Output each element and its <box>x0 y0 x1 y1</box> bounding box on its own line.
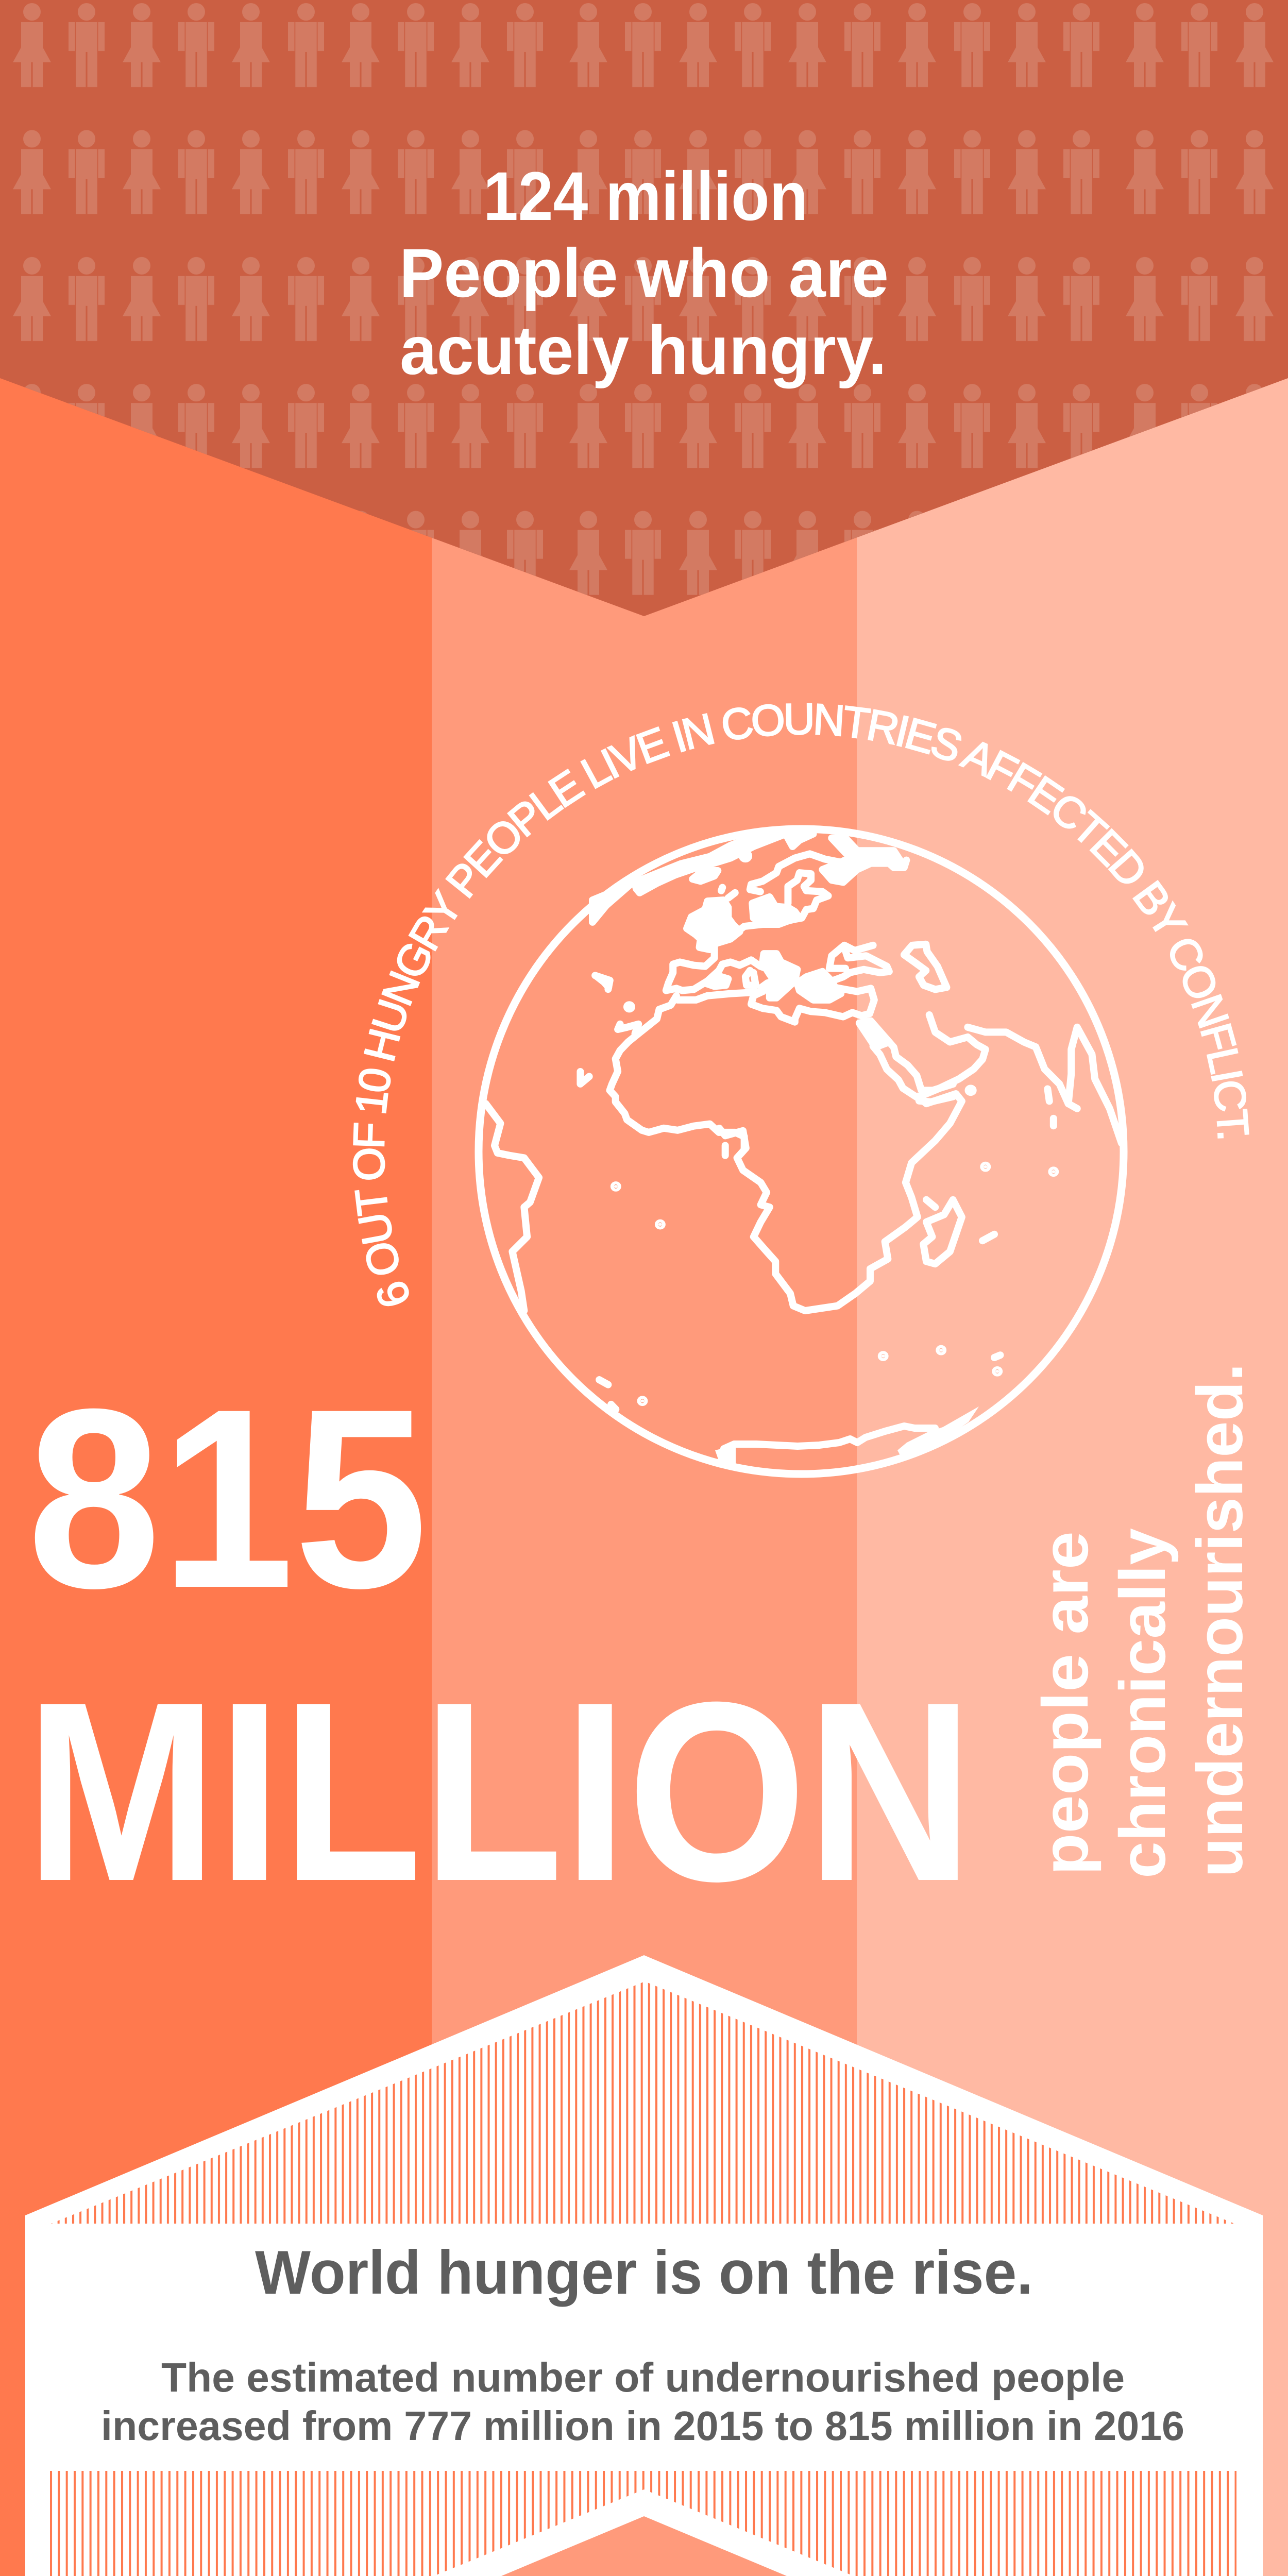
header text: acutely hungry: acutely hungry. <box>400 312 887 389</box>
background column: light peach <box>857 0 1288 2576</box>
background column: mid peach <box>432 0 857 2576</box>
big number: 815: 815 <box>27 1356 428 1641</box>
icon: globe <box>479 829 1124 1474</box>
banner heading: World hunger is on the rise. <box>255 2238 1033 2307</box>
background column: orange <box>0 0 432 2576</box>
curved text around globe: 6 OUT OF 10 HUNGRY PEOPLE LIVE IN COUNTRIES AFFECTED BY CONFLICT. <box>352 703 1249 1307</box>
banner shape <box>25 1955 1263 2576</box>
people icon pattern <box>0 0 1288 616</box>
vertical text: people are: people are <box>1029 1531 1101 1875</box>
header text: people who are: People who are <box>399 235 889 312</box>
Antarctica coast <box>715 1406 979 1464</box>
vertical text: undernourished: undernourished. <box>1183 1363 1256 1877</box>
vertical text: chronically: chronically <box>1106 1528 1179 1878</box>
banner text line 1: The estimated number of undernourished people <box>161 2354 1125 2400</box>
banner text line 2: increased from 777 million in 2015 to 815 million in 2016 <box>101 2403 1184 2449</box>
header chevron background <box>0 0 1288 616</box>
panel: acutely hungry header <box>0 0 1288 616</box>
stripes above heading <box>51 1981 1234 2224</box>
panel: world hunger banner <box>25 1955 1263 2576</box>
header text: 124 million: 124 million <box>483 158 808 235</box>
stripes below text <box>50 2471 1236 2576</box>
globe outline <box>479 829 1124 1474</box>
continents: Africa, Arabia, India, Madagascar, South America, islands <box>486 855 1122 1410</box>
continents: Europe and North Africa coast <box>592 834 953 1149</box>
big word: MILLION: MILLION <box>25 1649 973 1935</box>
